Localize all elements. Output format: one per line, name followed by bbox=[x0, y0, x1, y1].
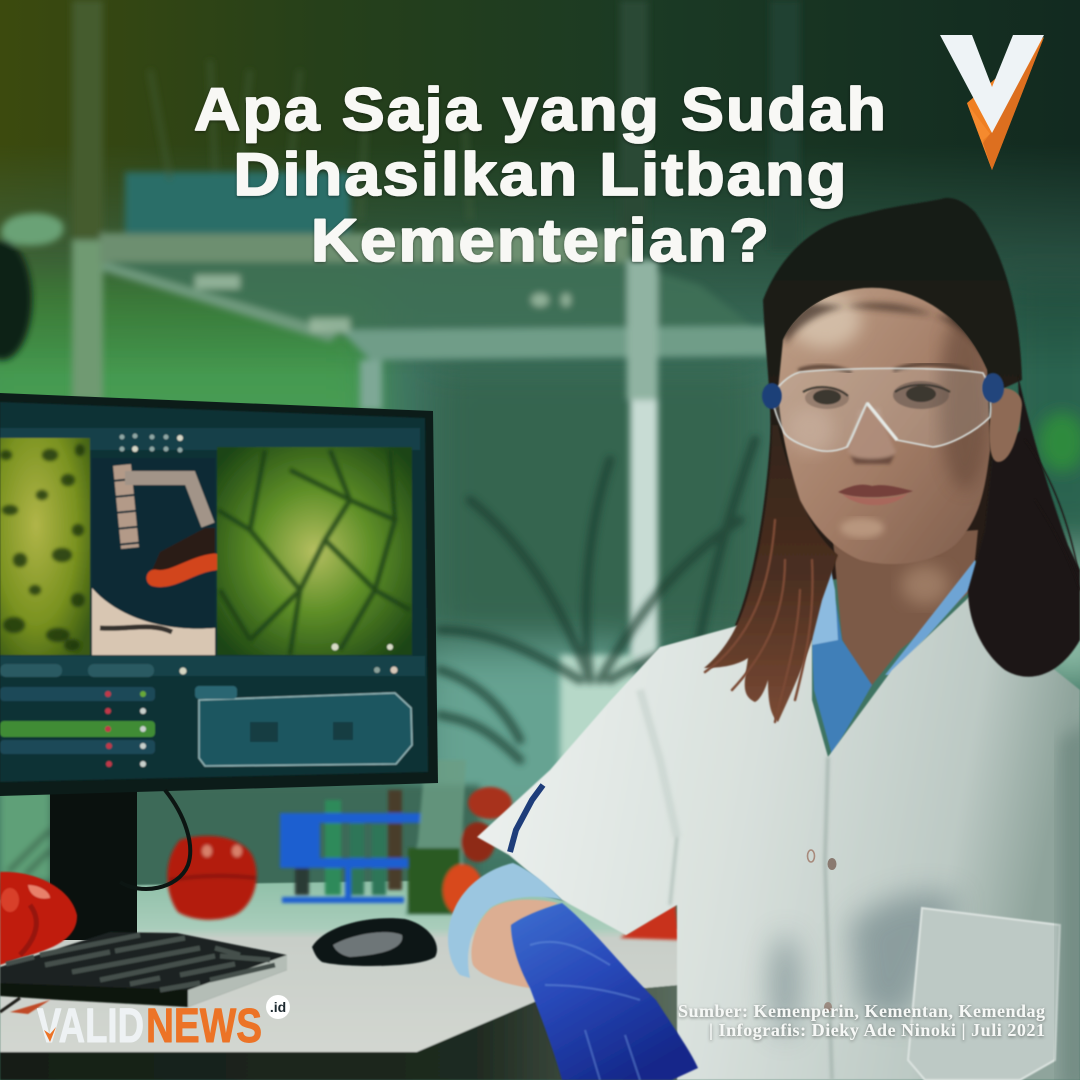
blue glove bbox=[511, 903, 698, 1080]
screen properties panel bbox=[199, 693, 412, 766]
test tubes bbox=[295, 790, 402, 895]
source credits: Sumber: Kemenperin, Kementan, Kemendag bbox=[678, 1001, 1045, 1021]
monitor frame bbox=[0, 393, 438, 796]
coat buttons bbox=[808, 850, 836, 1012]
logo: V mark bbox=[940, 35, 1044, 170]
blue test tube rack bbox=[280, 813, 422, 903]
flask bbox=[405, 760, 466, 915]
lab shelving, blurred bbox=[0, 0, 800, 765]
keyboard bbox=[0, 932, 287, 1014]
hair right bbox=[968, 375, 1080, 677]
face shading bbox=[780, 292, 991, 538]
desk surface bbox=[0, 880, 680, 1052]
loose hair strands bbox=[705, 440, 1080, 722]
monitor title text: Procedural Genetic Analysis bbox=[108, 411, 203, 418]
tomato center bbox=[167, 836, 257, 920]
screen icon rows bbox=[120, 434, 183, 452]
logo: VALIDNEWS wordmark: NEWS bbox=[146, 1000, 262, 1053]
logo: VALIDNEWS wordmark bbox=[37, 1000, 262, 1053]
nose bbox=[848, 408, 896, 464]
forearm bbox=[471, 900, 558, 988]
hair left front bbox=[704, 425, 838, 722]
logo: .id badge: .id bbox=[270, 999, 286, 1015]
title: Dihasilkan Litbang bbox=[234, 141, 848, 208]
coat bbox=[477, 585, 1080, 1080]
safety glasses bbox=[762, 368, 1004, 451]
neck bbox=[833, 530, 978, 690]
back wall under monitor bbox=[0, 785, 480, 895]
title: Apa Saja yang Sudah bbox=[194, 76, 888, 143]
blue shirt collar bbox=[810, 555, 982, 755]
neck highlight bbox=[901, 565, 949, 605]
source credits bbox=[678, 1001, 1045, 1040]
hair behind bbox=[735, 198, 1022, 640]
logo: .id badge bbox=[266, 995, 290, 1019]
face bbox=[778, 288, 990, 564]
lips bbox=[838, 485, 913, 505]
title bbox=[194, 76, 888, 274]
desk front edge bbox=[0, 985, 680, 1080]
title: Kementerian? bbox=[311, 207, 771, 274]
coat shadow folds bbox=[771, 893, 960, 1035]
screen image: right leaf bbox=[217, 447, 412, 655]
screen toolbar bbox=[0, 656, 425, 676]
monitor stand bbox=[50, 785, 137, 940]
desk bbox=[0, 880, 680, 1080]
monitor bbox=[0, 393, 438, 940]
eyes bbox=[803, 381, 950, 409]
monitor screen bbox=[0, 402, 428, 782]
tomatoes behind bbox=[443, 787, 680, 940]
logo: VALIDNEWS wordmark: VALID bbox=[37, 1000, 144, 1053]
computer mouse bbox=[312, 918, 437, 966]
screen image: middle bbox=[92, 458, 215, 655]
screen image: left leaf bbox=[0, 438, 90, 655]
sleeve cuff bbox=[448, 863, 562, 978]
background plants bbox=[440, 440, 755, 760]
eyebrows bbox=[800, 364, 968, 372]
lab bench items bbox=[280, 760, 680, 940]
coat shadow right bbox=[1060, 720, 1080, 1080]
source credits: | Infografis: Dieky Ade Ninoki | Juli 2021 bbox=[709, 1020, 1045, 1040]
sleeve stripe bbox=[510, 785, 543, 852]
monitor cable bbox=[120, 790, 190, 889]
ear bbox=[989, 388, 1022, 462]
screen layer list bbox=[0, 687, 155, 767]
scientist bbox=[448, 198, 1080, 1080]
coat lapel edge and folds bbox=[640, 690, 832, 1080]
coat pocket bbox=[908, 908, 1060, 1080]
tomato left bbox=[0, 872, 77, 965]
